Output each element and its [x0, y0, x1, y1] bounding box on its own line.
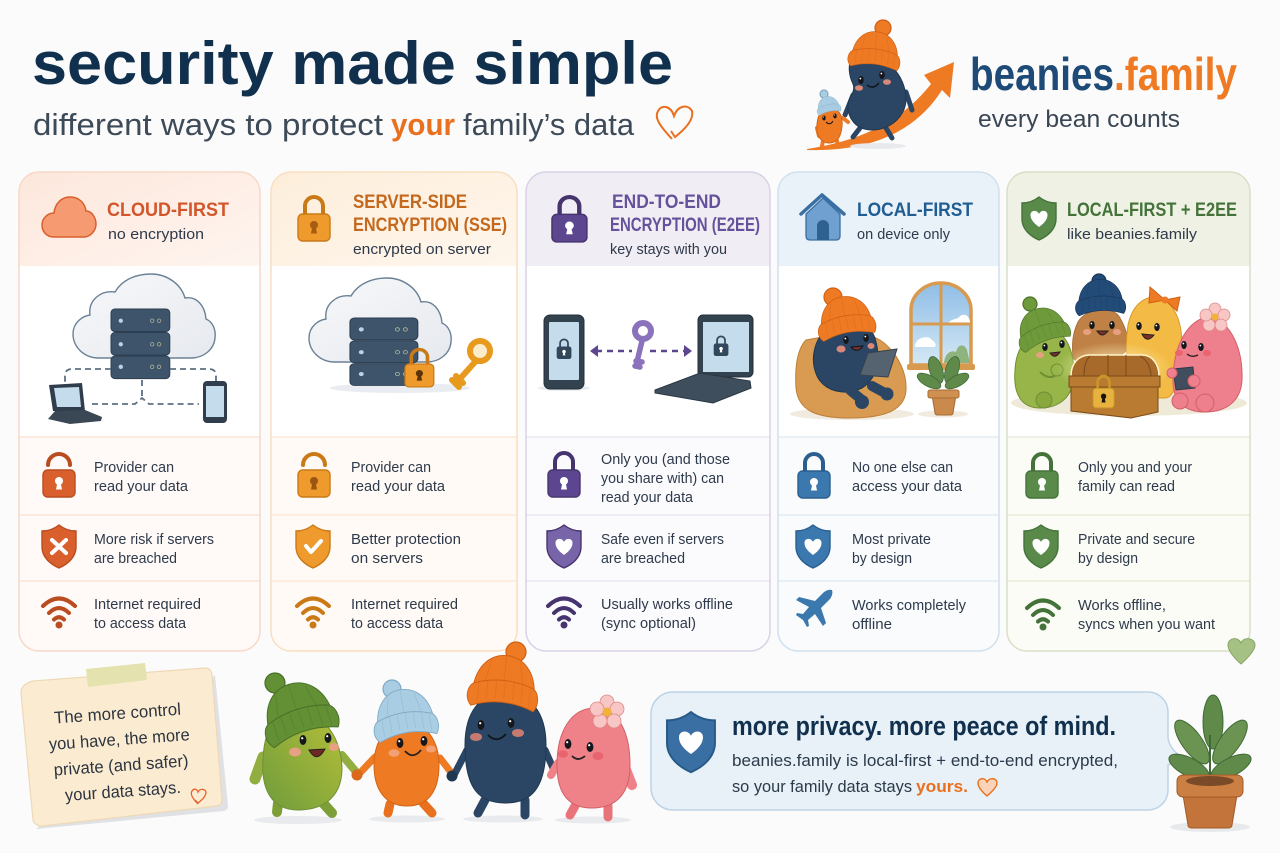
callout text line two: yours. — [916, 777, 968, 796]
row: offline plane: offline — [852, 617, 892, 633]
row: data access — [43, 454, 189, 497]
row: breach safety: Safe even if servers — [601, 532, 724, 548]
sticky note — [21, 663, 228, 829]
heading: LOCAL-FIRST + E2EE — [1067, 200, 1237, 221]
icon: outline heart — [657, 107, 692, 139]
callout text: beanies.family is local-first + end-to-end encrypted, — [732, 751, 1118, 770]
illustration: cloud server with devices — [48, 274, 227, 424]
green bean — [252, 673, 357, 813]
heading: END-TO-END — [612, 192, 721, 213]
row: data access — [548, 452, 730, 506]
callout: more privacy — [651, 692, 1182, 810]
note text — [46, 699, 194, 806]
panel: local-first + e2ee — [1007, 172, 1250, 651]
row: privacy: Most private — [852, 532, 931, 548]
title: security made simple — [32, 30, 673, 97]
row: data access: Provider can — [94, 460, 174, 476]
row: connectivity: to access data — [94, 616, 187, 632]
row: breach safety — [547, 525, 724, 568]
note text: you have, the more — [48, 725, 190, 754]
row: connectivity: Works offline, — [1078, 598, 1166, 614]
illustration: bean on beanbag with window and plant — [790, 283, 975, 420]
icon: cloud — [42, 197, 96, 237]
row: privacy and security — [1024, 525, 1195, 568]
icon: small heart — [191, 789, 206, 804]
row: data access — [1026, 454, 1192, 498]
card 2 background — [271, 172, 517, 266]
row: connectivity: Internet required — [94, 597, 201, 613]
row: data access: read your data — [94, 479, 189, 495]
subheading: key stays with you — [610, 241, 727, 258]
subtitle: family’s data — [463, 107, 635, 142]
row: connectivity: syncs when you want — [1078, 617, 1215, 633]
logo wordmark — [970, 48, 1237, 100]
panel: end-to-end encryption — [526, 172, 770, 651]
illustration: locked server and key — [309, 278, 490, 393]
heading: ENCRYPTION (E2EE) — [610, 215, 760, 236]
icon: shield — [1022, 197, 1056, 240]
row: connectivity: to access data — [351, 616, 444, 632]
illustration: phone, key and laptop — [538, 315, 753, 403]
row: data access: No one else can — [852, 460, 953, 476]
callout text line two: so your family data stays — [732, 777, 912, 796]
subheading: on device only — [857, 226, 950, 243]
subheading: no encryption — [108, 226, 204, 243]
row: breach safety: are breached — [601, 551, 685, 567]
subtitle: different ways to protect — [33, 107, 383, 142]
heading: SERVER-SIDE — [353, 192, 467, 213]
card 5 background — [1007, 172, 1250, 266]
subtitle: your — [391, 107, 455, 142]
card 1 background — [19, 172, 260, 266]
row: data access: Provider can — [351, 460, 431, 476]
row: data access: Only you and your — [1078, 460, 1192, 476]
card 3 background — [526, 172, 770, 266]
row: privacy and security: by design — [1078, 551, 1138, 567]
row: data access: you share with) can — [601, 471, 724, 487]
row: breach protection: on servers — [351, 551, 423, 567]
row: connectivity: Usually works offline — [601, 597, 733, 613]
subheading: encrypted on server — [353, 241, 491, 258]
note text: private (and safer) — [53, 751, 189, 780]
card 4 background — [778, 172, 999, 266]
illustration: bean family with treasure chest — [1010, 274, 1247, 418]
icon: heart — [978, 779, 997, 796]
note text: your data stays. — [64, 778, 181, 805]
row: data access: family can read — [1078, 479, 1175, 495]
icon: lock — [298, 197, 330, 241]
row: breach risk: are breached — [94, 551, 177, 567]
logo wordmark: .family — [1114, 48, 1237, 100]
tagline: every bean counts — [978, 106, 1180, 133]
row: data access — [298, 454, 446, 497]
row: privacy — [796, 525, 931, 568]
row: connectivity: Internet required — [351, 597, 458, 613]
row: offline plane — [796, 590, 967, 633]
heading: CLOUD-FIRST — [107, 200, 229, 221]
row: breach protection: Better protection — [351, 532, 461, 548]
orange bean — [352, 680, 453, 813]
icon: house — [801, 195, 844, 240]
icon: green heart — [1228, 639, 1255, 664]
row: breach risk — [42, 525, 214, 568]
heading — [353, 192, 507, 236]
row: data access: access your data — [852, 479, 963, 495]
heading — [610, 192, 760, 236]
icon: shield — [667, 712, 715, 772]
heading: LOCAL-FIRST — [857, 200, 973, 221]
logo wordmark: beanies — [970, 48, 1114, 100]
row: connectivity — [297, 597, 458, 632]
row: privacy: by design — [852, 551, 912, 567]
row: data access: read your data — [601, 490, 694, 506]
logo mascots on arrow — [807, 20, 954, 150]
row: connectivity — [43, 597, 201, 632]
row: connectivity: (sync optional) — [601, 616, 696, 632]
panel: server-side encryption — [271, 172, 517, 651]
pink bean — [551, 695, 632, 817]
row: connectivity — [1027, 598, 1215, 633]
navy bean — [446, 642, 553, 815]
row: breach risk: More risk if servers — [94, 532, 214, 548]
tape — [86, 663, 147, 687]
panel: local-first — [778, 172, 999, 651]
row: connectivity — [548, 597, 733, 632]
panel: cloud-first — [19, 172, 260, 651]
subheading: like beanies.family — [1067, 226, 1198, 243]
illustration: potted plant — [1165, 695, 1255, 832]
note text: The more control — [53, 700, 181, 727]
icon: lock — [552, 197, 587, 242]
row: offline plane: Works completely — [852, 598, 967, 614]
row: data access: read your data — [351, 479, 446, 495]
row: privacy and security: Private and secure — [1078, 532, 1195, 548]
illustration: bean family holding hands — [252, 642, 632, 824]
row: data access — [798, 454, 963, 498]
row: breach protection — [296, 525, 461, 568]
subtitle — [33, 107, 635, 142]
heading: ENCRYPTION (SSE) — [353, 215, 507, 236]
row: data access: Only you (and those — [601, 452, 730, 468]
callout heading: more privacy. more peace of mind. — [732, 711, 1116, 741]
